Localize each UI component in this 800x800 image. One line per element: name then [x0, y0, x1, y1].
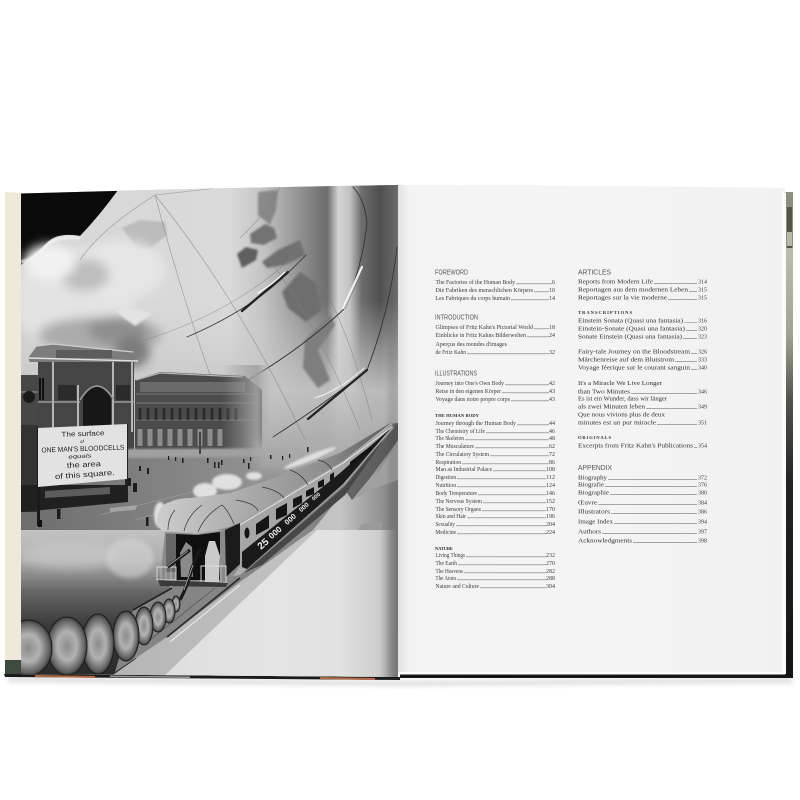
- section: appendix: Biografie: [578, 481, 604, 488]
- section: miracle: [578, 380, 707, 426]
- section: articles: Reportages sur la vie moderne: [578, 294, 667, 301]
- section: the human body: Medicine: [436, 530, 456, 536]
- section: appendix: 376: [698, 482, 707, 488]
- leader lines left column: [456, 284, 552, 588]
- section: transcriptions: TRANSCRIPTIONS: [578, 310, 632, 315]
- section: nature: Nature and Culture: [436, 584, 479, 590]
- section: introduction: INTRODUCTION: [435, 314, 478, 321]
- rear platform: [162, 530, 240, 582]
- number on train: 000: [266, 524, 284, 541]
- section: foreword: Die Fabriken des menschlichen Körpers: [436, 288, 534, 294]
- section: nature: 304: [546, 584, 555, 590]
- section: illustrations: Voyage dans notre propre corps: [436, 397, 511, 403]
- contents: right column: [578, 269, 707, 544]
- night sky: [21, 190, 118, 265]
- section: the human body: 108: [546, 467, 555, 473]
- fog and dark ground: [20, 530, 170, 677]
- billboard text: the area: [67, 459, 102, 470]
- section: illustrations: Journey into One's Own Body: [436, 381, 504, 387]
- billboard text: of: [80, 439, 85, 444]
- section: the human body: Journey through the Human Body: [436, 421, 516, 427]
- section: nature: 288: [546, 576, 555, 582]
- section: appendix: APPENDIX: [578, 465, 612, 472]
- section: illustrations: 43: [549, 389, 555, 395]
- section: the human body: 62: [549, 444, 555, 450]
- billboard text: The surface: [61, 430, 105, 439]
- section: appendix: 394: [698, 519, 707, 525]
- train windows: [244, 445, 372, 538]
- number on train: 000: [311, 492, 322, 502]
- section: the human body: THE HUMAN BODY: [435, 413, 480, 418]
- section: nature: The Earth: [436, 561, 457, 567]
- section: introduction: Glimpses of Fritz Kahn's Pictorial World: [436, 324, 533, 331]
- book cover: left bottom edge: [4, 660, 400, 680]
- section: miracle: 351: [698, 420, 707, 426]
- train: [154, 422, 394, 600]
- section: the human body: Man as Industrial Palace: [436, 467, 492, 473]
- section: miracle: minutes est un pur miracle: [578, 419, 656, 426]
- snow slope: [110, 423, 398, 677]
- section: transcriptions: Sonate Einstein (Quasi una fantasia): [578, 333, 682, 340]
- section: miracle: als zwei Minuten leben: [578, 403, 646, 410]
- section: the human body: The Skeleton: [436, 436, 464, 442]
- balcony rails: [157, 566, 226, 583]
- section: articles: [578, 269, 707, 301]
- train body: [238, 425, 394, 569]
- section: introduction: 32: [549, 350, 555, 356]
- section: the human body: 72: [549, 452, 555, 458]
- billboard with frame and posts: [21, 424, 128, 527]
- section: the human body: Nutrition: [436, 483, 456, 489]
- section: the human body: 224: [546, 530, 555, 536]
- section: appendix: 380: [698, 490, 707, 496]
- section: foreword: 6: [552, 280, 555, 286]
- section: transcriptions: Einstein Sonata (Quasi una fantasia): [578, 318, 683, 324]
- leader lines right column: [598, 283, 697, 542]
- section: originals: ORIGINALS: [578, 435, 611, 440]
- blood cells chain: [21, 596, 180, 674]
- section: appendix: 397: [698, 529, 707, 535]
- section: articles: 315: [698, 287, 707, 293]
- section: foreword: 10: [549, 288, 555, 294]
- section: fairy-tale journey: 326: [698, 349, 707, 355]
- section: transcriptions: 316: [698, 318, 707, 324]
- section: appendix: Illustrators: [578, 508, 611, 515]
- train roof: [157, 422, 392, 533]
- section: transcriptions: Einstein-Sonate (Quasi una fantasia): [578, 325, 685, 332]
- section: transcriptions: 320: [698, 326, 707, 332]
- section: the human body: 152: [546, 499, 555, 505]
- city square: [21, 432, 345, 530]
- hoses into the train: [168, 549, 200, 600]
- section: the human body: 46: [549, 429, 555, 435]
- passengers: [180, 542, 193, 577]
- section: the human body: Respiration: [436, 460, 461, 466]
- orbit rails: [187, 187, 397, 437]
- section: miracle: It's a Miracle We Live Longer: [578, 380, 663, 387]
- section: introduction: 18: [549, 325, 555, 331]
- right page with contents: [398, 185, 786, 674]
- section: illustrations: ILLUSTRATIONS: [435, 370, 477, 377]
- section: nature: 232: [546, 553, 555, 559]
- section: the human body: 44: [549, 421, 555, 427]
- section: articles: Reports from Modern Life: [578, 278, 653, 285]
- section: illustrations: 43: [549, 397, 555, 403]
- contents: left column: [435, 269, 555, 590]
- book shadow: [8, 677, 794, 686]
- section: the human body: 196: [546, 514, 555, 520]
- book cover: right edge: [400, 192, 793, 678]
- section: articles: 314: [698, 279, 707, 285]
- section: the human body: The Circulatory System: [436, 452, 489, 458]
- section: appendix: 372: [698, 475, 707, 481]
- building: Galleria wing: [135, 365, 272, 455]
- section: introduction: [435, 314, 555, 356]
- section: the human body: 48: [549, 436, 555, 442]
- section: fairy-tale journey: Fairy-tale Journey on the Bloodstream: [578, 348, 690, 355]
- section: the human body: The Musculature: [436, 444, 474, 450]
- section: transcriptions: 323: [698, 334, 707, 340]
- section: appendix: Biography: [578, 474, 608, 481]
- section: miracle: Es ist ein Wunder, dass wir länger: [578, 396, 668, 402]
- section: the human body: 146: [546, 491, 555, 497]
- section: illustrations: 42: [549, 381, 555, 387]
- number on train: 25: [256, 536, 272, 552]
- section: the human body: 170: [546, 507, 555, 513]
- section: foreword: [435, 269, 555, 302]
- section: articles: 315: [698, 295, 707, 301]
- section: the human body: Digestion: [436, 475, 456, 481]
- section: nature: 282: [546, 569, 555, 575]
- section: foreword: 14: [549, 296, 555, 302]
- section: nature: 270: [546, 561, 555, 567]
- number on train: 000: [298, 501, 311, 514]
- billboard text: of this square.: [55, 468, 115, 481]
- section: appendix: 398: [698, 538, 707, 544]
- billboard text: ONE MAN'S BLOODCELLS: [41, 445, 125, 454]
- track: [115, 424, 396, 672]
- section: nature: NATURE: [435, 546, 453, 551]
- section: appendix: Image Index: [578, 518, 614, 525]
- section: transcriptions: [578, 310, 707, 340]
- section: fairy-tale journey: Märchenreise auf dem Blutstrom: [578, 356, 674, 363]
- section: appendix: Biographie: [578, 489, 609, 496]
- spine shading: [388, 180, 399, 680]
- section: the human body: Body Temperature: [436, 491, 477, 497]
- section: the human body: The Nervous System: [436, 499, 482, 505]
- section: the human body: Skin and Hair: [436, 514, 466, 520]
- people on the square: [57, 447, 308, 526]
- roof steam: [154, 445, 337, 528]
- section: fairy-tale journey: [578, 348, 707, 371]
- section: the human body: The Chemistry of Life: [436, 428, 485, 435]
- section: the human body: 124: [546, 483, 555, 489]
- section: originals: 354: [698, 443, 707, 449]
- section: miracle: Que nous vivions plus de deux: [578, 412, 666, 418]
- section: fairy-tale journey: 333: [698, 357, 707, 363]
- section: the human body: 112: [546, 475, 555, 481]
- section: introduction: Einblicke in Fritz Kahns Bilderwelten: [436, 333, 526, 339]
- building: triumphal arch: [21, 344, 138, 450]
- globe: [21, 180, 399, 680]
- section: appendix: 386: [698, 509, 707, 515]
- number on train: 000: [283, 512, 298, 527]
- section: the human body: Sexuality: [436, 522, 455, 528]
- number on train: [258, 492, 320, 550]
- photograph: globe, city and blood cell train: [4, 180, 399, 680]
- section: nature: The Heavens: [436, 569, 464, 575]
- lower body band: [242, 427, 392, 569]
- section: nature: [435, 546, 555, 590]
- section: articles: Reportagen aus dem modernen Leben: [578, 286, 689, 293]
- section: originals: [578, 435, 707, 449]
- section: the human body: The Sensory Organs: [436, 507, 482, 513]
- billboard text: equals: [68, 453, 92, 461]
- section: fairy-tale journey: 340: [698, 365, 707, 371]
- section: foreword: The Factories of the Human Body: [436, 279, 515, 286]
- section: articles: ARTICLES: [578, 269, 611, 276]
- section: appendix: Acknowledgments: [578, 537, 633, 544]
- section: originals: Excerpts from Fritz Kahn's Publications: [578, 442, 694, 449]
- section: foreword: Les Fabriques du corps humain: [436, 296, 510, 302]
- billboard text: [41, 430, 125, 481]
- clouds: [15, 240, 165, 368]
- section: the human body: 204: [546, 522, 555, 528]
- section: introduction: de Fritz Kahn: [436, 350, 466, 356]
- section: the human body: [435, 413, 555, 536]
- continents: [122, 190, 335, 388]
- section: appendix: 384: [698, 500, 707, 506]
- section: miracle: 349: [698, 404, 707, 410]
- section: illustrations: Reise in den eigenen Körper: [436, 389, 501, 395]
- section: introduction: 24: [549, 333, 555, 339]
- section: introduction: Aperçus des mondes d'images: [436, 342, 508, 348]
- section: appendix: Authors: [578, 528, 602, 535]
- left page cream margin: [5, 192, 22, 661]
- section: fairy-tale journey: Voyage féerique sur le courant sanguin: [578, 364, 691, 371]
- section: miracle: than Two Minutes: [578, 388, 631, 395]
- section: illustrations: [435, 370, 555, 403]
- section: foreword: FOREWORD: [435, 269, 468, 276]
- section: miracle: 346: [698, 389, 707, 395]
- section: nature: Living Things: [436, 553, 466, 559]
- section: the human body: 86: [549, 460, 555, 466]
- section: nature: The Atom: [436, 576, 456, 582]
- section: appendix: Œuvre: [578, 499, 597, 506]
- meridians: [80, 186, 372, 440]
- section: appendix: [578, 465, 707, 544]
